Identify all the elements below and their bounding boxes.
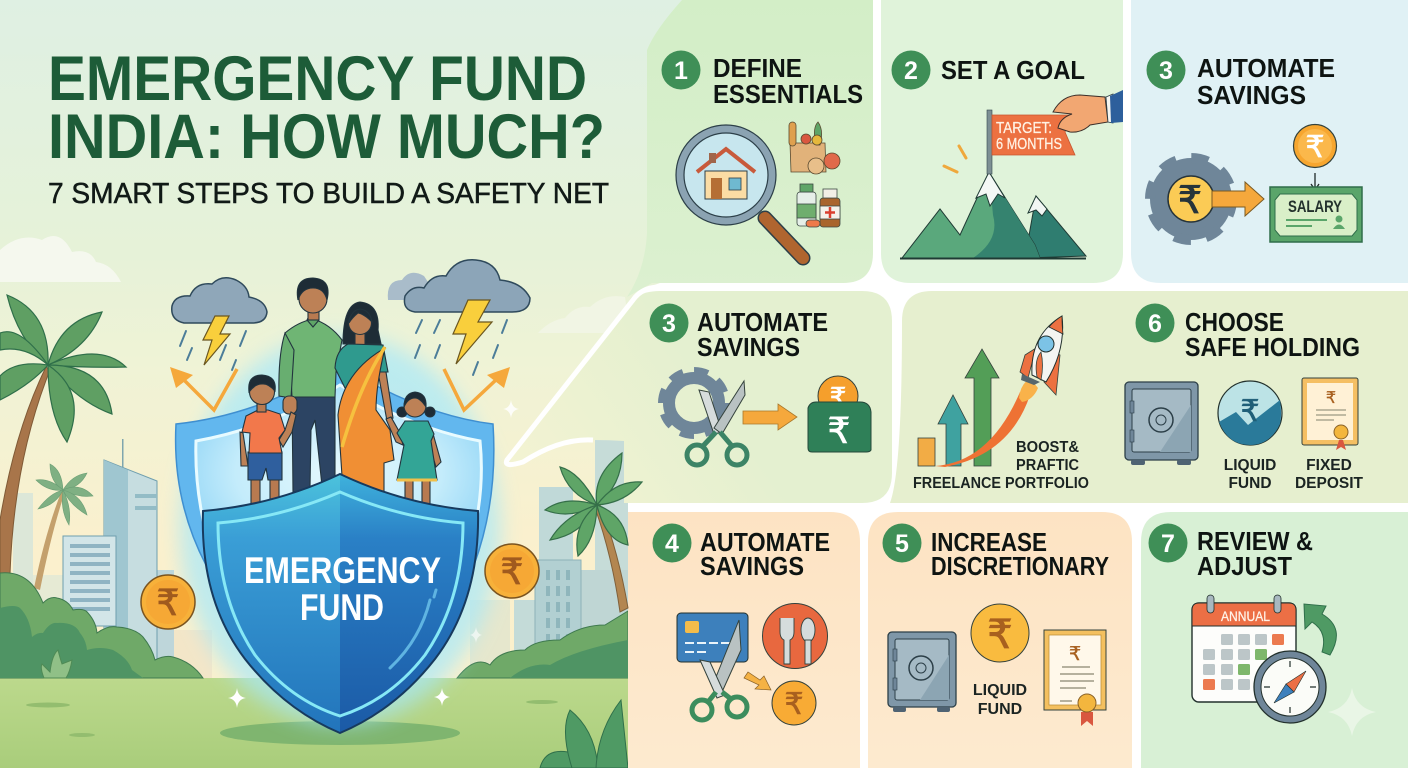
rocket captions [913, 439, 1089, 492]
icon: gear with rupee: ₹ [1178, 178, 1202, 222]
icon: calendar [1192, 595, 1296, 702]
step 4 heading [700, 527, 830, 581]
icon: certificate [1044, 630, 1106, 726]
title [48, 44, 605, 172]
asset labels: FUND [1228, 475, 1272, 492]
step 3 heading: SAVINGS [1197, 80, 1306, 110]
step 6 badge: 6 [1148, 310, 1162, 338]
shield label: FUND [300, 587, 384, 628]
middle badge [650, 304, 688, 342]
icon: target flag: 6 MONTHS [996, 136, 1062, 153]
panel: step 1 define essentials [627, 0, 873, 297]
step 6 heading [1185, 307, 1360, 362]
icon: safe [888, 632, 956, 712]
liquid fund label: LIQUID [973, 682, 1027, 699]
coin left [141, 575, 195, 629]
step 2 badge [892, 50, 930, 90]
step 4 badge [652, 524, 692, 562]
rocket captions: PRAFTIC [1016, 457, 1079, 474]
step 6 heading: CHOOSE [1185, 307, 1284, 337]
icon: rupee coin [772, 681, 816, 725]
back shield [176, 365, 494, 565]
step 4 heading: SAVINGS [700, 551, 804, 581]
palm tree: large left [0, 295, 126, 574]
icon: fork and spoon [762, 604, 828, 668]
icon: liquid fund [1218, 381, 1282, 445]
deflection arrows [170, 367, 510, 410]
icon: rupee coin [971, 604, 1029, 662]
step 7 badge: 7 [1161, 530, 1175, 558]
man [279, 278, 342, 492]
asset labels: DEPOSIT [1295, 475, 1364, 492]
step 2 heading: SET A GOAL [941, 55, 1085, 85]
coin left: ₹ [157, 583, 179, 624]
cloud: top left [0, 236, 121, 282]
shield glow [180, 335, 500, 725]
panel: step 4 automate savings [628, 512, 860, 768]
sparkle decoration [1328, 688, 1376, 736]
title: INDIA: HOW MUCH? [48, 102, 605, 172]
step 5 badge [882, 524, 922, 562]
step 6 heading: SAFE HOLDING [1185, 332, 1360, 362]
woman [335, 302, 394, 492]
icon: fixed deposit: ₹ [1326, 388, 1336, 407]
ground shadows [26, 700, 558, 745]
step 3 badge: 3 [1159, 57, 1173, 85]
middle heading: SAVINGS [697, 332, 800, 362]
title: EMERGENCY FUND [48, 44, 587, 114]
palm tree: small left [34, 464, 93, 590]
asset labels: FIXED [1306, 457, 1352, 474]
icon: wallet and coin: ₹ [828, 411, 850, 452]
step 1 heading [713, 53, 863, 109]
step 3 heading [1197, 53, 1335, 110]
panel: step 6 choose safe holding [890, 291, 1408, 503]
middle heading: AUTOMATE [697, 307, 828, 337]
girl [386, 392, 441, 505]
icon: mountain [900, 172, 1086, 258]
lightning bolt right [453, 300, 492, 364]
icon: salary slip [1270, 187, 1362, 242]
step 4 badge: 4 [665, 530, 679, 558]
rocket captions: FREELANCE PORTFOLIO [913, 475, 1089, 492]
icon: calendar: ANNUAL [1221, 608, 1270, 624]
icon: target flag [944, 90, 1123, 174]
step 4 heading: AUTOMATE [700, 527, 830, 557]
step 5 badge: 5 [895, 530, 909, 558]
step 5 heading [931, 527, 1109, 581]
step 2 badge: 2 [904, 57, 918, 85]
step 1 heading: ESSENTIALS [713, 79, 863, 109]
step 3 badge [1146, 50, 1186, 90]
icon: down arrow [1311, 173, 1319, 190]
rocket captions: BOOST& [1016, 439, 1079, 456]
icon: magnifier with house [676, 125, 803, 258]
boy [240, 375, 296, 505]
icon: credit card and scissors [677, 613, 748, 720]
icon: rupee coin: ₹ [784, 687, 804, 722]
icon: safe [1125, 382, 1198, 465]
liquid fund label: FUND [978, 701, 1022, 718]
icon: salary slip: SALARY [1288, 197, 1343, 216]
asset labels [1224, 457, 1364, 492]
arrow to salary [1212, 182, 1264, 216]
arrow to wallet [743, 404, 797, 430]
shield label: EMERGENCY [244, 550, 441, 591]
middle badge: 3 [662, 310, 676, 338]
icon: target flag: TARGET: [996, 120, 1052, 137]
icon: gear with rupee [1150, 158, 1232, 240]
small arrow [744, 672, 771, 690]
coin right [485, 544, 539, 598]
panel: step 5 increase discretionary [868, 512, 1132, 768]
step 1 heading: DEFINE [713, 53, 802, 83]
coin right: ₹ [501, 552, 523, 593]
icon: rupee coin: ₹ [987, 612, 1013, 658]
step 7 heading: ADJUST [1197, 551, 1292, 581]
step 7 heading: REVIEW & [1197, 526, 1313, 556]
foliage: bottom right [540, 700, 628, 768]
step 7 badge [1148, 524, 1188, 562]
palm tree: right [545, 453, 642, 612]
bushes right [457, 611, 628, 678]
step 7 heading [1197, 526, 1313, 581]
front shield [203, 474, 478, 733]
liquid fund label [973, 682, 1027, 718]
bushes left [0, 573, 203, 678]
icon: groceries [789, 122, 840, 174]
icon: rupee coin [1294, 124, 1336, 168]
asset labels: LIQUID [1224, 457, 1276, 474]
lightning bolt left [203, 316, 230, 365]
icon: wallet and coin [808, 376, 871, 452]
icon: rupee coin: ₹ [1305, 130, 1325, 165]
city skyline left [13, 439, 212, 678]
panel: step 3 automate savings middle with speech tail [506, 287, 892, 503]
sparkles [228, 400, 519, 708]
panel: step 7 review and adjust [1141, 512, 1408, 768]
icon: certificate: ₹ [1069, 643, 1081, 665]
storm cloud left [172, 278, 267, 370]
icon: compass [1254, 651, 1326, 723]
icon: growth arrows and rocket [918, 316, 1063, 467]
step 6 badge [1136, 304, 1174, 342]
storm cloud right [388, 260, 530, 375]
icon: curved review arrow [1304, 604, 1336, 655]
shield label [244, 550, 441, 628]
icon: wallet and coin: ₹ [830, 383, 846, 413]
icon: liquid fund: ₹ [1240, 394, 1260, 429]
cloud: right of scene [538, 296, 630, 333]
middle heading [697, 307, 828, 362]
step 5 heading: INCREASE [931, 527, 1047, 557]
panel: step 2 set a goal [881, 0, 1123, 283]
panel: step 3 automate savings top [1131, 0, 1408, 283]
icon: gear with scissors [662, 371, 747, 465]
ground [0, 678, 628, 768]
family [240, 278, 441, 505]
icon: medicine bottles [797, 184, 840, 227]
step 3 heading: AUTOMATE [1197, 53, 1335, 83]
step 1 badge: 1 [674, 57, 688, 85]
step 5 heading: DISCRETIONARY [931, 551, 1109, 581]
subtitle: 7 SMART STEPS TO BUILD A SAFETY NET [48, 178, 609, 210]
icon: fixed deposit [1302, 378, 1358, 450]
city skyline right [470, 437, 628, 678]
step 1 badge [662, 50, 700, 90]
